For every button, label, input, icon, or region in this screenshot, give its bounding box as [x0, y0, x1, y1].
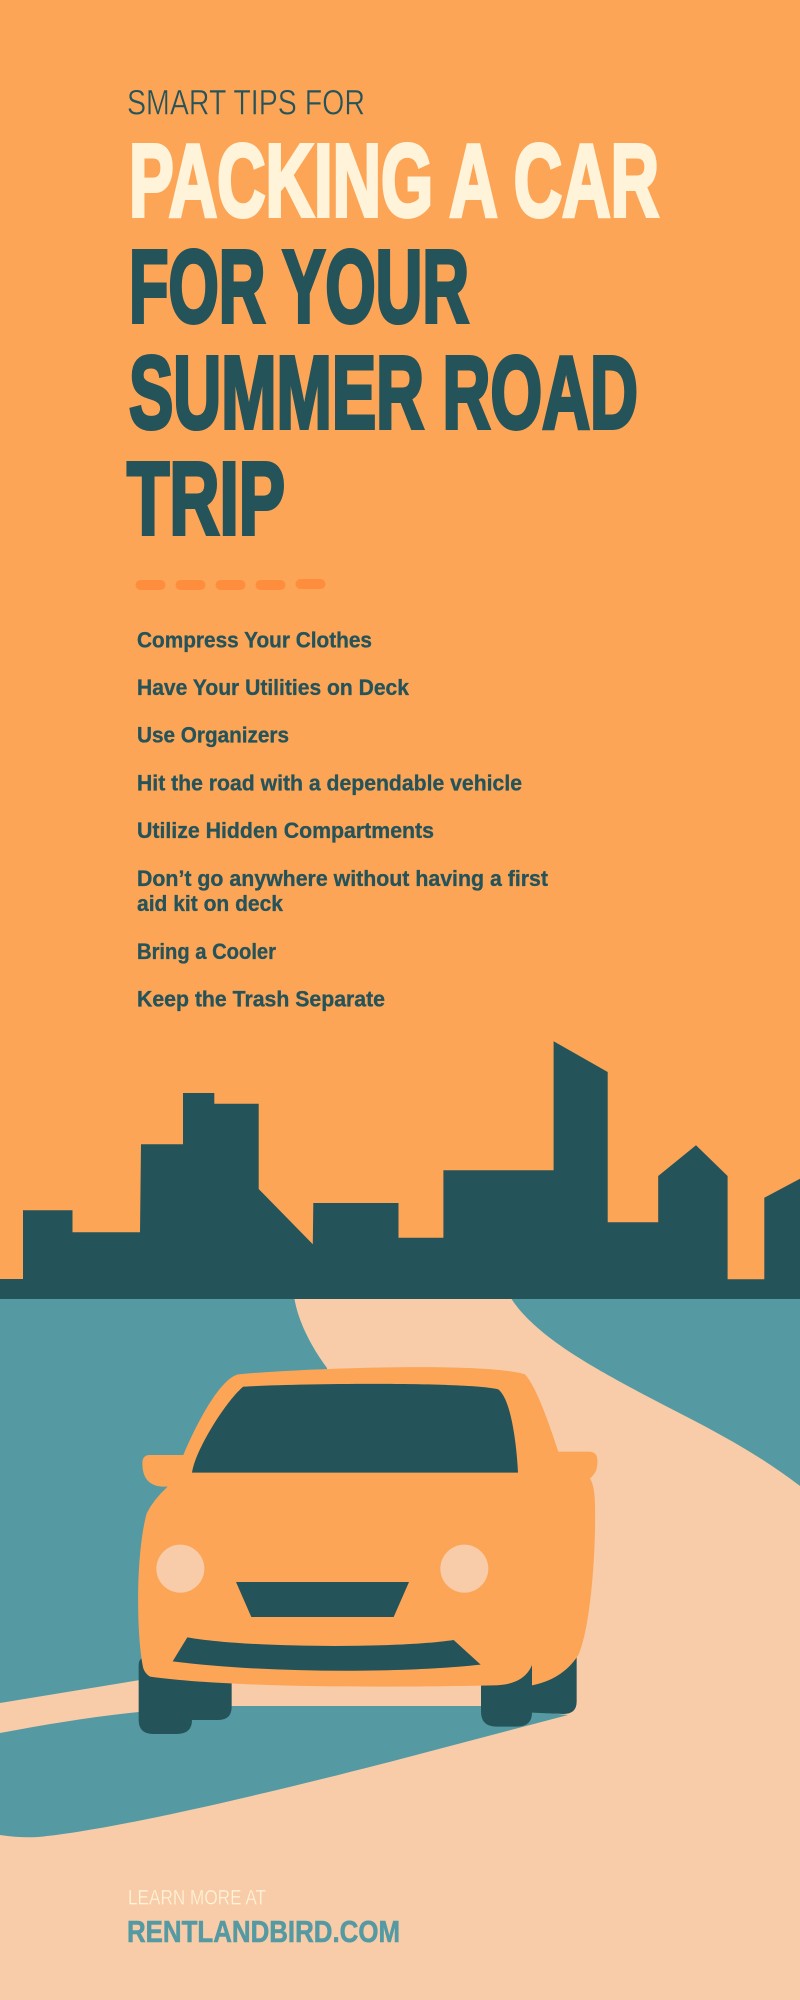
tip 6: Don’t go anywhere without having a first — [137, 866, 549, 891]
city skyline — [0, 1041, 800, 1300]
windshield — [192, 1384, 518, 1473]
tip 6: aid kit on deck — [137, 891, 284, 916]
tip 5: Utilize Hidden Compartments — [137, 818, 434, 843]
tip 1: Compress Your Clothes — [137, 627, 372, 652]
car body — [138, 1367, 597, 1687]
footer — [127, 1886, 400, 1949]
tip 6 — [137, 866, 549, 916]
grass: top right — [512, 1299, 800, 1486]
dashed divider — [136, 579, 326, 590]
grass: lower left — [0, 1706, 568, 1837]
grass: top left — [0, 1299, 340, 1703]
wheels: left — [139, 1658, 232, 1734]
learn more label: LEARN MORE AT — [128, 1886, 266, 1909]
list of tips — [137, 627, 549, 1012]
tip 3: Use Organizers — [137, 723, 289, 748]
tip 2: Have Your Utilities on Deck — [137, 675, 410, 700]
wheels: right — [481, 1653, 577, 1727]
headlight: left — [156, 1545, 204, 1593]
car illustration — [138, 1367, 597, 1734]
grille — [236, 1582, 409, 1617]
subtitle: SMART TIPS FOR — [127, 84, 365, 122]
title line 2: FOR YOUR — [129, 229, 469, 344]
road: peach ground — [0, 1299, 800, 2000]
title — [127, 123, 659, 556]
title line 4: TRIP — [127, 441, 285, 556]
tip 4: Hit the road with a dependable vehicle — [137, 771, 522, 796]
tip 8: Keep the Trash Separate — [137, 987, 385, 1012]
headlight: right — [440, 1545, 488, 1593]
tip 7: Bring a Cooler — [137, 939, 276, 964]
lower air intake — [173, 1637, 481, 1671]
background: orange sky — [0, 0, 800, 1300]
website: RENTLANDBIRD.COM — [127, 1914, 400, 1949]
